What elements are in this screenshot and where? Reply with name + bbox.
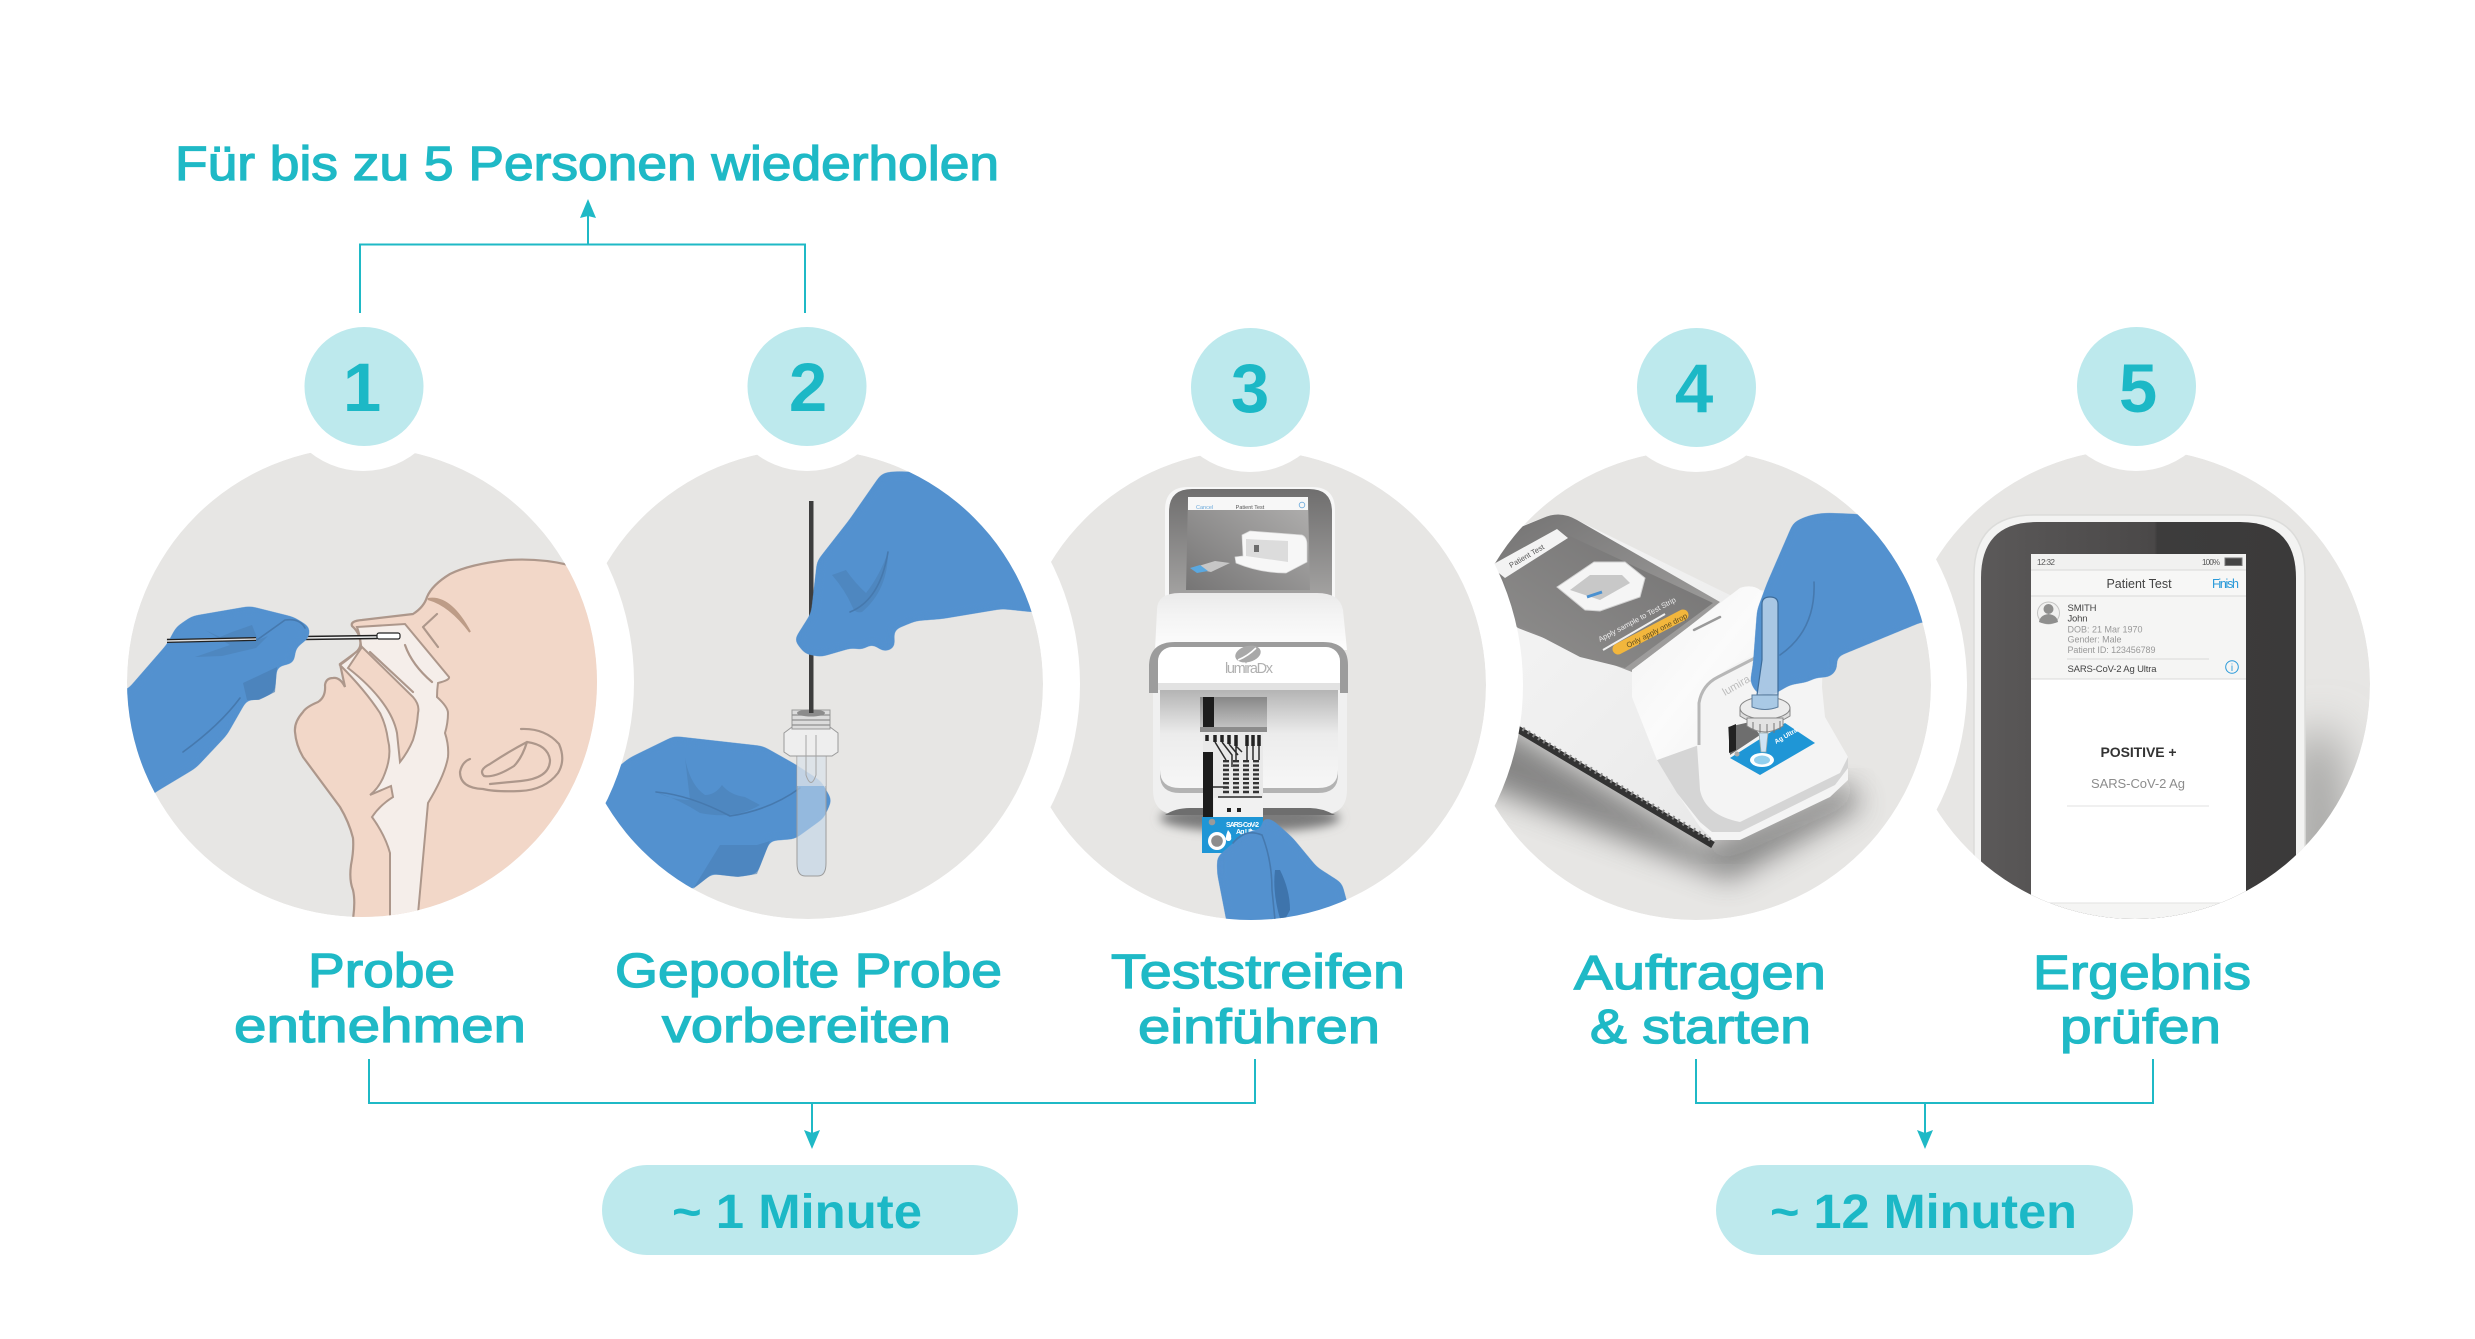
phone: Patient ID: 123456789 xyxy=(2068,645,2156,655)
label: step 2 xyxy=(615,945,1002,1053)
glove 1 xyxy=(90,606,310,840)
phone xyxy=(1974,515,2305,933)
pill: one minute: ~ 1 Minute xyxy=(672,1186,922,1239)
arrow: bracket to twelve minutes xyxy=(1696,1059,2153,1149)
logo xyxy=(1225,643,1274,677)
panel: step 5 result xyxy=(1936,454,2370,919)
device: Only apply one drop xyxy=(1625,611,1689,650)
panel: step 2 prepare pooled sample xyxy=(573,449,1080,919)
test strip xyxy=(1730,723,1815,775)
pill: twelve minutes xyxy=(1716,1165,2133,1255)
label: step 3 xyxy=(1111,946,1405,1054)
label: step 5 xyxy=(2033,947,2251,1054)
badge 4 xyxy=(1637,328,1756,447)
analyzer: Patient Test xyxy=(1236,505,1265,511)
icon: info xyxy=(2226,661,2238,674)
badge 2: 2 xyxy=(789,349,827,426)
swab xyxy=(167,633,400,641)
icon: info: i xyxy=(2231,663,2233,674)
pill: twelve minutes: ~ 12 Minuten xyxy=(1770,1186,2077,1239)
device: Apply sample to Test Strip xyxy=(1597,595,1677,644)
ear xyxy=(460,729,562,791)
glove bottom xyxy=(590,736,832,900)
device: Patient Test xyxy=(1508,542,1547,570)
phone: Patient Test xyxy=(2106,577,2172,591)
phone: 12:32 xyxy=(2037,558,2056,567)
avatar xyxy=(2038,602,2060,624)
label: step 3: einführen xyxy=(1138,1001,1380,1054)
phone: 100% xyxy=(2202,558,2220,567)
panel: step 4 apply and start xyxy=(1494,456,1931,920)
label: step 5: Ergebnis xyxy=(2033,947,2251,1000)
phone: DOB: 21 Mar 1970 xyxy=(2068,624,2142,634)
phone: SARS-CoV-2 Ag Ultra xyxy=(2068,664,2157,675)
title: Für bis zu 5 Personen wiederholen xyxy=(175,138,999,191)
badge 2 xyxy=(748,327,866,446)
head xyxy=(295,560,620,925)
badge 3 xyxy=(1191,328,1310,447)
device xyxy=(1440,514,1848,846)
label: step 4: & starten xyxy=(1590,1001,1811,1054)
badge 5 xyxy=(2077,327,2196,446)
dropper tube xyxy=(1740,597,1790,752)
label: step 1: Probe xyxy=(308,945,455,998)
swab stick xyxy=(809,501,814,715)
panel: step 3 insert strip xyxy=(1016,450,1486,950)
badge 5: 5 xyxy=(2119,350,2157,427)
nasal cavity and throat xyxy=(340,624,449,925)
test strip: SARS-CoV-2 xyxy=(1226,822,1259,829)
glove 4 xyxy=(1750,512,1922,694)
badge 1: 1 xyxy=(343,349,381,426)
label: step 2: Gepoolte Probe xyxy=(615,945,1002,998)
test strip: Ag Ultra xyxy=(1236,829,1258,836)
glove top xyxy=(794,460,1080,657)
label: step 1 xyxy=(234,945,526,1053)
label: step 1: entnehmen xyxy=(234,1000,526,1053)
palate xyxy=(348,647,418,762)
sample tube xyxy=(784,701,838,876)
pill: one minute xyxy=(602,1165,1018,1255)
phone: SARS-CoV-2 Ag xyxy=(2091,776,2185,791)
panel: step 1 take sample xyxy=(90,447,620,925)
analyzer xyxy=(1149,487,1348,815)
label: step 4: Auftragen xyxy=(1574,947,1826,1000)
device: lumira xyxy=(1720,673,1753,699)
analyzer: Cancel xyxy=(1196,505,1213,511)
phone: POSITIVE + xyxy=(2100,744,2176,760)
phone: John xyxy=(2068,614,2088,624)
badge 4: 4 xyxy=(1675,350,1713,427)
notches behind number badges xyxy=(278,301,2221,472)
badge 3: 3 xyxy=(1231,350,1269,427)
phone: Gender: Male xyxy=(2068,634,2122,644)
phone: Finish xyxy=(2212,577,2239,591)
arrow: bracket to one minute xyxy=(369,1059,1255,1149)
badge 1 xyxy=(304,327,424,446)
label: step 2: vorbereiten xyxy=(662,1000,951,1053)
test strip: Ag Ultra xyxy=(1774,727,1799,746)
logo: lumiraDx xyxy=(1225,661,1274,677)
test strip xyxy=(1202,732,1263,853)
label: step 3: Teststreifen xyxy=(1111,946,1405,999)
arrow: repeat bracket xyxy=(360,199,805,313)
phone: SMITH xyxy=(2068,603,2097,614)
glove 3 xyxy=(1217,817,1360,950)
label: step 4 xyxy=(1574,947,1826,1054)
label: step 5: prüfen xyxy=(2060,1001,2221,1054)
